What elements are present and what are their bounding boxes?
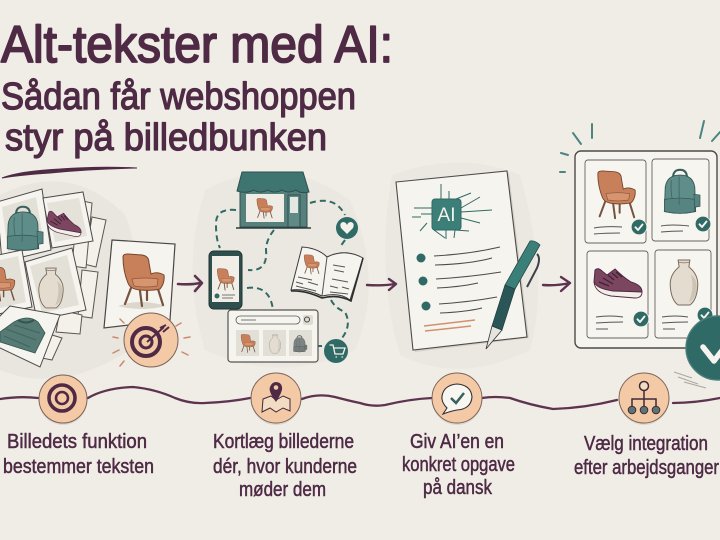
step 2 label: dér, hvor kunderne [213,456,357,478]
bullet list [416,247,501,331]
step 3 icon: chat check [432,373,482,425]
card: vase [655,250,711,338]
step 3 label: på dansk [423,477,493,499]
AI chip: AI [438,205,455,226]
shoe photo [43,192,93,248]
wavy connector line [0,387,720,409]
illustration: finished product grid [560,121,720,388]
step 2 label [213,431,357,501]
step 1 label: Billedets funktion [7,431,147,453]
pen [486,241,540,349]
title line 1: Alt-tekster med AI: [1,16,393,74]
step 4 icon: hierarchy [619,373,669,425]
illustration: AI brief and pen [396,171,540,352]
sweater photo [0,306,60,367]
chair photo left [0,250,32,314]
step 1 label: bestemmer teksten [3,456,154,478]
card: backpack [652,159,709,241]
step 3 label: Giv AI’en en [410,431,504,453]
backpack photo [0,189,51,262]
title line 2: Sådan får webshoppen [1,76,356,118]
step 1 icon: target [39,375,87,425]
heart badge [336,217,358,239]
step 1 label [3,431,154,478]
open book [291,247,363,301]
illustration: photo pile [0,189,106,367]
sparkle rays [560,121,720,172]
title line 3: styr på billedbunken [5,117,327,159]
illustration: customer touchpoints [209,172,363,363]
step 2 icon: map pin [251,373,301,425]
back photos [42,200,106,360]
dashed paths [216,201,348,346]
step 3 label [402,431,515,499]
check badges [631,216,713,327]
arrow 1 [178,276,202,291]
vase photo [25,248,86,320]
step 2 label: møder dem [239,479,326,501]
paper [396,171,529,352]
illustration: chair photo [104,240,175,328]
card: chair [585,160,646,243]
AI chip [412,184,492,239]
step 2 label: Kortlæg billederne [213,431,354,453]
title underline [2,167,137,178]
title [1,16,393,178]
big check badge [674,316,720,388]
step 3 label: konkret opgave [402,454,515,476]
card: shoe [587,251,648,338]
cart badge [324,339,348,363]
arrow 2 [367,279,396,290]
search panel [228,310,318,362]
arrow 3 [543,277,570,291]
phone [209,251,242,309]
store [236,172,311,228]
grid panel [575,151,717,348]
step 4 label [574,433,719,479]
icon: target with rays [113,313,190,367]
